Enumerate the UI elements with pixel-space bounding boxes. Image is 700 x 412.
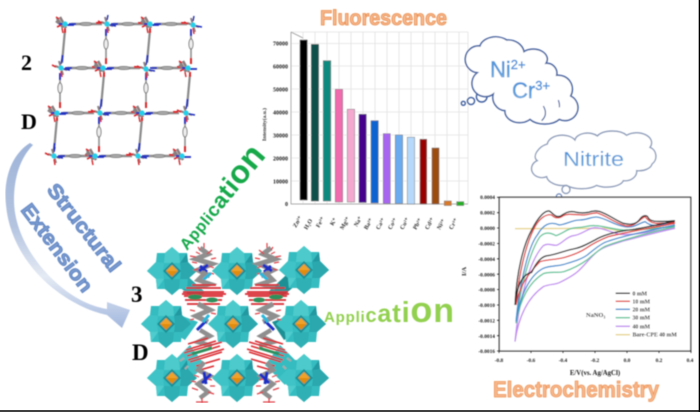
y axis labels: -0.0006 (478, 272, 495, 278)
label: 2D (21, 50, 37, 134)
y axis labels: 0.0004 (480, 195, 495, 201)
legend: 10 mM (632, 299, 651, 305)
legend: 30 mM (632, 316, 651, 322)
x axis labels: Cd²⁺ (424, 217, 436, 231)
x axis labels: Co²⁺ (387, 217, 399, 231)
y axis labels: 60000 (273, 64, 288, 70)
x axis labels (292, 215, 460, 231)
legend: 0 mM (632, 291, 648, 297)
text: Application (light green): Application (324, 289, 454, 330)
x axis title: E/V(vs. Ag/AgCl) (570, 370, 620, 377)
x axis labels: 0.2 (656, 358, 663, 364)
y axis labels: 50000 (273, 88, 288, 94)
text: Nitrite: Nitrite (563, 149, 624, 171)
y axis labels: 0.0000 (480, 226, 495, 232)
x axis labels: K⁺ (329, 217, 339, 227)
2D lattice structure (45, 15, 202, 165)
label: 3D: D (132, 340, 149, 365)
label: 3D: 3 (131, 282, 142, 307)
x axis labels: Ni²⁺ (436, 218, 447, 231)
y axis labels: 40000 (273, 110, 288, 116)
thought cloud: Nitrite (532, 131, 656, 203)
x axis labels: -0.4 (559, 358, 568, 364)
y axis labels: -0.0002 (478, 242, 495, 248)
x axis labels: Fe³⁺ (315, 216, 326, 229)
curves (515, 211, 675, 342)
legend: 20 mM (632, 307, 651, 313)
x axis labels: -0.6 (527, 358, 536, 364)
label: 2D: 2 (21, 50, 32, 75)
x axis labels: -0.8 (495, 358, 504, 364)
label: 3D (131, 282, 149, 365)
y axis labels (273, 42, 288, 208)
title: Fluorescence: Fluorescence (320, 7, 447, 30)
bar chart: fluorescence (261, 32, 468, 231)
y axis labels: -0.0008 (478, 288, 495, 294)
y axis labels: -0.0014 (478, 334, 495, 340)
y axis labels: -0.0012 (478, 318, 495, 324)
y axis labels: 10000 (273, 180, 288, 186)
thought cloud: Ni and Cr ions (461, 37, 578, 124)
y axis labels: -0.0004 (478, 257, 495, 263)
legend: NaNO₃ (586, 312, 605, 319)
y axis labels: 0 (285, 202, 288, 208)
y axis labels: 70000 (273, 42, 288, 48)
x axis labels: Na⁺ (353, 215, 364, 228)
y axis labels: 30000 (273, 134, 288, 140)
legend: 40 mM (632, 324, 651, 330)
text: Application (green, rotated): Application (164, 137, 273, 256)
x axis labels: Cu²⁺ (399, 217, 411, 231)
text: Extension: Extension (16, 200, 97, 297)
legend (586, 291, 677, 339)
x axis labels (495, 358, 694, 364)
y axis labels (478, 195, 495, 355)
x axis labels: Mg²⁺ (339, 216, 352, 231)
label: 2D: D (21, 109, 37, 134)
bars (300, 40, 464, 206)
x axis labels: 0.0 (624, 358, 631, 364)
y axis labels: -0.0010 (478, 303, 495, 309)
y axis labels: 0.0002 (480, 210, 495, 216)
y axis title: I/A (461, 267, 468, 276)
x axis labels: H₂O (304, 218, 314, 231)
y axis labels: -0.0016 (478, 349, 495, 355)
x axis labels: Pb²⁺ (412, 217, 424, 231)
text: Ni2+: 2+ (511, 57, 526, 72)
x axis labels: -0.2 (591, 358, 600, 364)
line chart: electrochemistry (461, 195, 694, 377)
title: Electrochemistry: Electrochemistry (493, 377, 660, 402)
y axis title: Intensity(a.u.) (261, 108, 268, 141)
curved arrow: structural extension (5, 143, 130, 328)
x axis labels: Zn²⁺ (292, 215, 304, 229)
text: Cr3+: 3+ (535, 78, 550, 93)
y axis labels: 20000 (273, 156, 288, 162)
legend: Bare-CPE 40 mM (632, 333, 677, 339)
text: Ni2+: Ni (490, 57, 511, 82)
3D framework structure (141, 243, 329, 403)
x axis labels: 0.4 (687, 358, 694, 364)
x axis labels: Ca²⁺ (375, 217, 387, 231)
x axis labels: Cr³⁺ (448, 217, 460, 231)
text: Cr3+: Cr (512, 78, 535, 103)
x axis labels: Ba²⁺ (363, 217, 375, 231)
text: Structural: Structural (42, 180, 125, 277)
